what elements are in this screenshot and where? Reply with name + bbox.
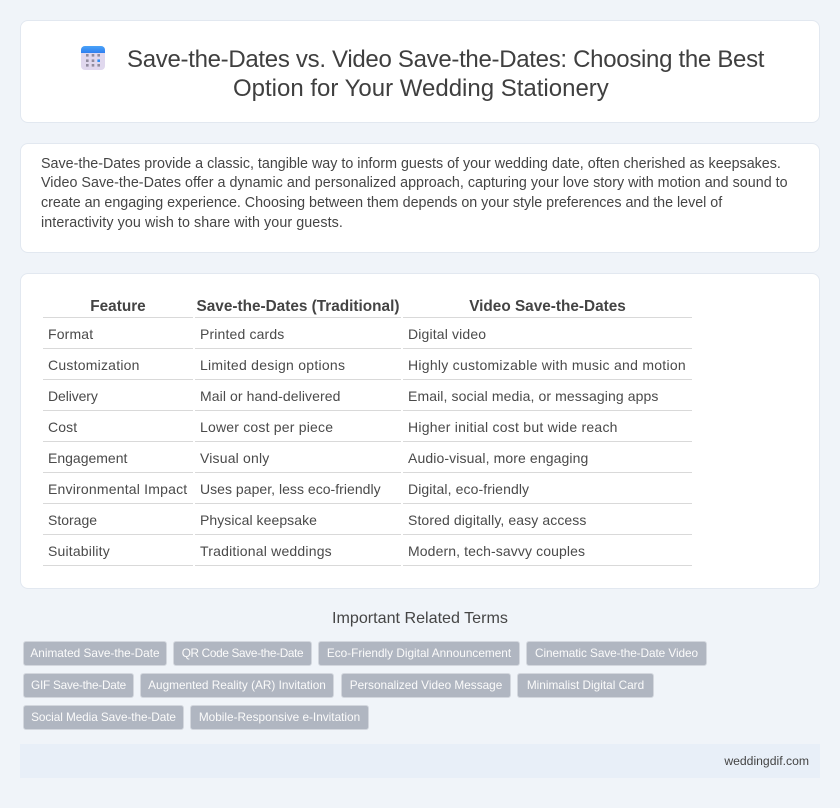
comparison table: Physical keepsake	[200, 512, 317, 528]
comparison table: Lower cost per piece	[200, 419, 333, 435]
related terms tags: Cinematic Save-the-Date Video	[535, 646, 698, 660]
intro text: interactivity you wish to share with your guests.	[41, 215, 343, 231]
header panel	[20, 20, 820, 123]
comparison table: Digital video	[408, 326, 486, 342]
related terms tags: QR Code Save-the-Date	[182, 646, 303, 660]
comparison table: Stored digitally, easy access	[408, 512, 587, 528]
comparison table	[43, 298, 692, 566]
comparison table: Storage	[48, 512, 97, 528]
comparison table: Save-the-Dates (Traditional)	[197, 298, 399, 315]
intro text: create an engaging experience. Choosing between them depends on your style preferences and the level of	[41, 195, 722, 211]
comparison table: Mail or hand-delivered	[200, 388, 340, 404]
related terms tags: Mobile-Responsive e-Invitation	[199, 710, 360, 724]
footer source text: weddingdif.com	[724, 754, 809, 768]
comparison table: Visual only	[200, 450, 269, 466]
related terms tags: Personalized Video Message	[350, 678, 502, 692]
comparison table: Traditional weddings	[200, 543, 332, 559]
comparison table: Printed cards	[200, 326, 284, 342]
title: Save-the-Dates vs. Video Save-the-Dates: Choosing the Best	[127, 46, 764, 73]
intro text: Save-the-Dates provide a classic, tangible way to inform guests of your wedding date, often cherished as keepsakes.	[41, 156, 781, 172]
comparison table: Delivery	[48, 388, 98, 404]
related terms tags: Social Media Save-the-Date	[31, 710, 176, 724]
comparison table: Video Save-the-Dates	[469, 298, 626, 315]
comparison table: Modern, tech-savvy couples	[408, 543, 585, 559]
comparison table: Digital, eco-friendly	[408, 481, 529, 497]
footer	[20, 744, 820, 778]
comparison table: Limited design options	[200, 357, 345, 373]
comparison table: Cost	[48, 419, 77, 435]
comparison table: Audio-visual, more engaging	[408, 450, 588, 466]
intro text	[41, 156, 788, 231]
related terms heading: Important Related Terms	[332, 609, 508, 627]
related terms tags: Eco-Friendly Digital Announcement	[327, 646, 511, 660]
comparison table: Suitability	[48, 543, 110, 559]
table panel	[20, 273, 820, 589]
related terms tags: Animated Save-the-Date	[30, 646, 160, 660]
comparison table: Email, social media, or messaging apps	[408, 388, 658, 404]
comparison table: Highly customizable with music and motion	[408, 357, 686, 373]
related terms tags: Minimalist Digital Card	[527, 678, 644, 692]
title: Option for Your Wedding Stationery	[233, 75, 609, 102]
comparison table: Customization	[48, 357, 140, 373]
comparison table: Uses paper, less eco-friendly	[200, 481, 381, 497]
related terms tags	[23, 641, 707, 730]
intro panel	[20, 143, 820, 253]
comparison table: Feature	[90, 298, 146, 315]
comparison table: Engagement	[48, 450, 127, 466]
intro text: Video Save-the-Dates offer a dynamic and personalized approach, capturing your love story with motion and sound to	[41, 175, 788, 191]
related terms tags: GIF Save-the-Date	[31, 678, 126, 692]
comparison table: Higher initial cost but wide reach	[408, 419, 618, 435]
comparison table: Environmental Impact	[48, 481, 187, 497]
title	[127, 46, 764, 102]
icon: calendar	[81, 46, 105, 70]
related terms tags: Augmented Reality (AR) Invitation	[148, 678, 326, 692]
comparison table: Format	[48, 326, 93, 342]
